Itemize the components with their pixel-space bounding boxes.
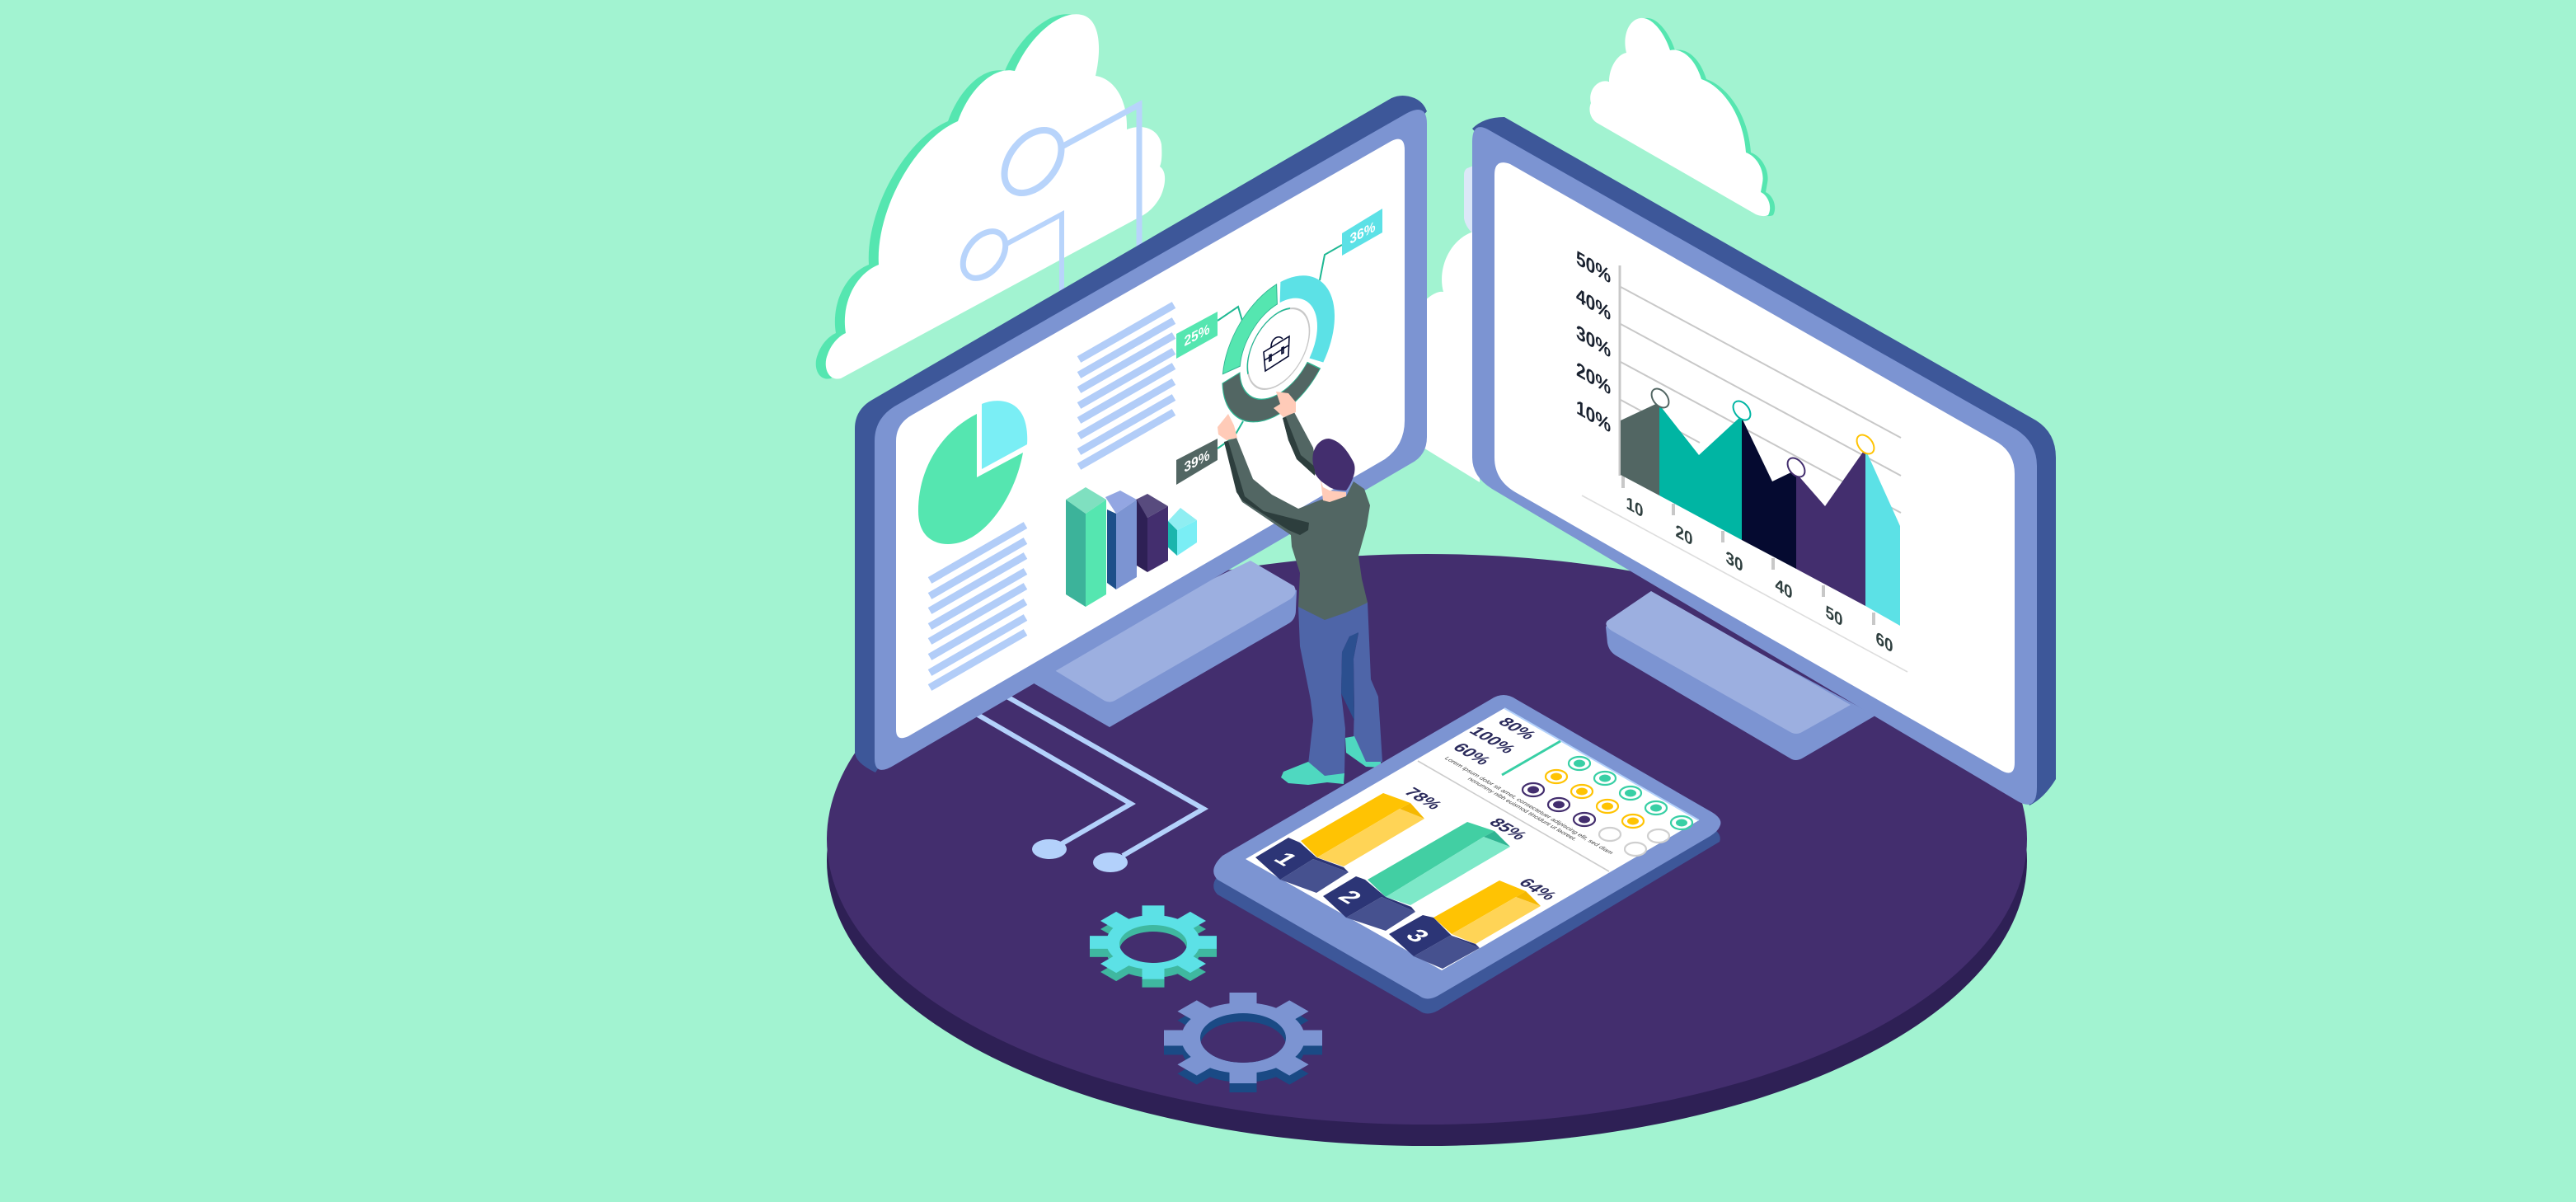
tablet bar 1	[1301, 793, 1424, 866]
gear: periwinkle	[1164, 993, 1322, 1092]
label: 25%	[1176, 312, 1218, 359]
leader lines for donut labels	[1218, 245, 1342, 448]
area chart: x axis labels: 50	[1825, 600, 1843, 631]
gear: cyan	[1090, 905, 1217, 988]
bar percent labels: 85%	[1485, 815, 1532, 843]
area chart: data point markers	[1648, 386, 1878, 480]
area chart: y axis labels	[1576, 247, 1611, 438]
label: 39%	[1176, 439, 1218, 485]
label: 36%: 36%	[1350, 218, 1375, 247]
pie chart	[918, 401, 1027, 544]
sweater torso and front arm	[1224, 438, 1370, 620]
number tab 3: 3	[1400, 926, 1435, 946]
hair	[1312, 439, 1355, 491]
tablet percentages	[1448, 715, 1541, 768]
tablet: infographic device on the floor	[1213, 695, 1720, 1014]
area chart: x axis labels	[1626, 491, 1893, 657]
cloud: cloud between the monitors	[1422, 163, 1480, 482]
label: 39%: 39%	[1185, 447, 1209, 476]
number tab 3	[1389, 915, 1480, 969]
bar percent labels: 64%	[1514, 876, 1561, 903]
bar percent labels	[1400, 785, 1561, 903]
icon: briefcase	[1264, 336, 1289, 371]
monitor: right screen with area chart	[1472, 117, 2056, 805]
stand: left monitor base	[1022, 561, 1297, 727]
label: 36%	[1342, 209, 1382, 256]
area chart: y axis labels: 40%	[1576, 284, 1611, 326]
platform: purple disc	[827, 554, 2027, 1146]
tablet bar 2	[1368, 822, 1510, 905]
area chart: y axis labels: 50%	[1576, 247, 1611, 289]
arm underside shadow	[1224, 441, 1309, 535]
number tab 2: 2	[1332, 887, 1368, 908]
tablet percentages: 60%	[1448, 740, 1495, 768]
area chart: y axis labels: 10%	[1576, 397, 1611, 438]
tablet percentages: 80%	[1494, 715, 1541, 742]
area chart: x axis labels: 30	[1726, 546, 1743, 576]
shoe: front	[1281, 762, 1344, 785]
tablet bar 3	[1433, 880, 1541, 944]
stand: right monitor base	[1606, 591, 1875, 760]
bar percent labels: 78%	[1400, 785, 1447, 812]
number tab 1	[1255, 838, 1349, 893]
area chart: y axis labels: 20%	[1576, 359, 1611, 400]
area chart: axes and grid	[1582, 265, 1907, 672]
area chart: x axis labels: 60	[1876, 627, 1893, 657]
number tab 2	[1323, 876, 1415, 931]
back arm	[1283, 412, 1319, 478]
tablet percentages: 100%	[1465, 725, 1520, 756]
area chart: y axis labels: 30%	[1576, 322, 1611, 363]
text block: lower left placeholder lines	[930, 525, 1025, 688]
area chart: x axis labels: 20	[1675, 519, 1693, 550]
person: man reaching up to the donut chart	[1218, 392, 1382, 785]
tablet rating dots	[1523, 757, 1692, 856]
3d bar chart	[1066, 487, 1197, 607]
inner leg shade	[1341, 632, 1358, 721]
neck	[1321, 480, 1346, 502]
scene: isometric analytics illustration	[816, 14, 2056, 1146]
donut chart	[1222, 251, 1335, 447]
hand: back	[1274, 392, 1296, 417]
hand: front	[1218, 414, 1237, 440]
label: 25%: 25%	[1185, 321, 1209, 350]
tablet caption: Lorem ipsum dolor sit amet, consectetuer adipiscing elit, sed diam	[1443, 755, 1616, 856]
number tab 1: 1	[1268, 849, 1303, 870]
shoe: back	[1345, 736, 1381, 768]
wires: circuit lines with round terminals	[948, 682, 1204, 872]
trousers	[1298, 602, 1382, 776]
area chart: coloured segments	[1621, 402, 1900, 626]
cloud: large left cloud with network lines	[816, 14, 1165, 379]
area chart: x axis labels: 10	[1626, 491, 1644, 522]
text block: upper placeholder lines	[1079, 305, 1174, 467]
cloud: small top right cloud	[1589, 18, 1775, 216]
area chart: x axis labels: 40	[1776, 573, 1792, 603]
tablet caption: nonummy nibh euismod tincidunt ut laoreet.	[1466, 776, 1579, 842]
monitor: left screen with dashboard	[855, 96, 1427, 772]
